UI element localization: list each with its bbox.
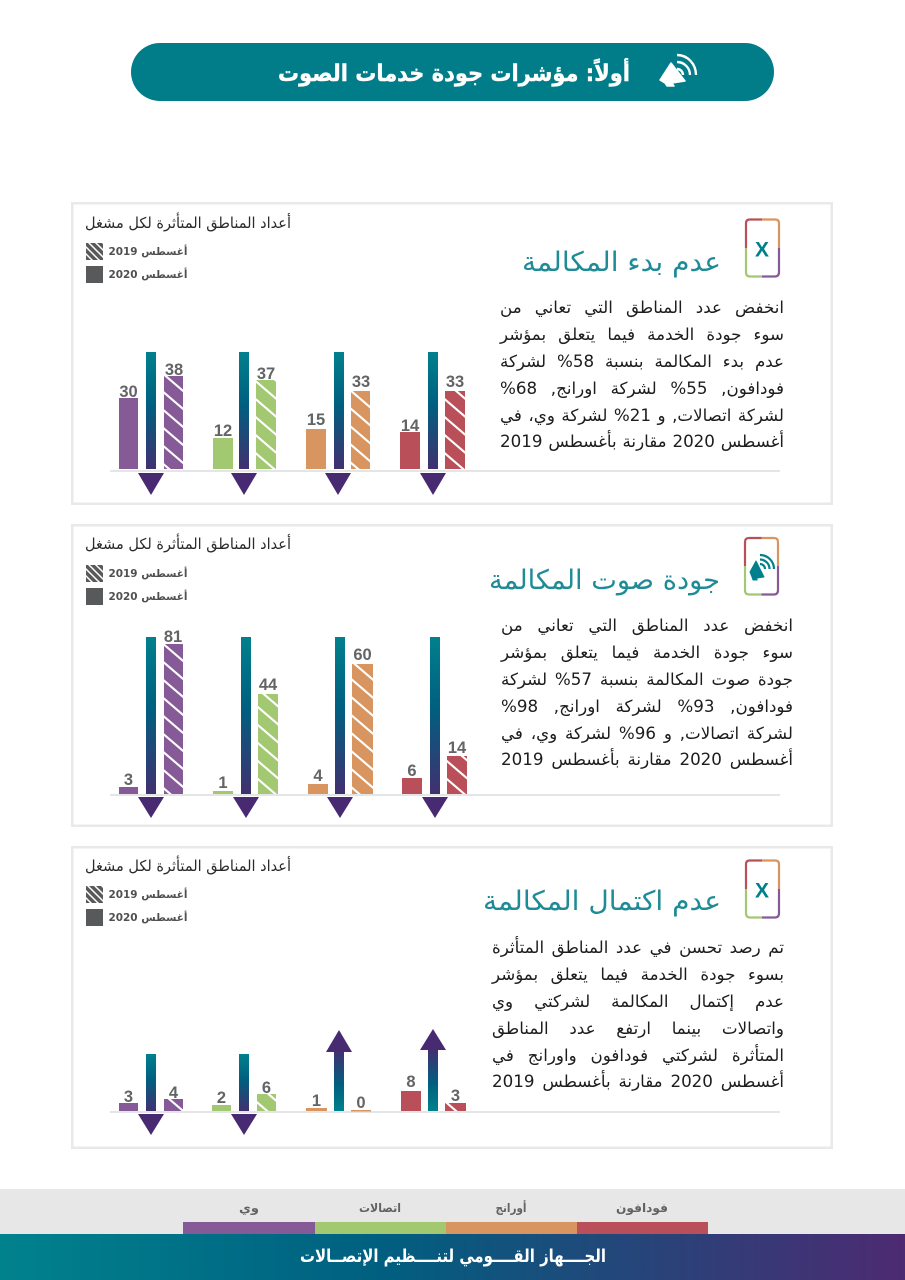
bar chart: 3 bbox=[124, 771, 133, 789]
bar chart: 30 bbox=[119, 383, 138, 401]
bar chart bbox=[119, 1029, 466, 1135]
legend bbox=[86, 565, 188, 605]
bar chart: 38 bbox=[165, 361, 183, 379]
body text bbox=[500, 615, 793, 769]
baseline bbox=[110, 470, 780, 472]
panel heading: عدم اكتمال المكالمة bbox=[483, 886, 721, 917]
heading: voice quality indicators: أولاً: مؤشرات جودة خدمات الصوت bbox=[278, 57, 630, 87]
body text: المتأثرة لشركتي فودافون واورانج في bbox=[492, 1045, 784, 1065]
legend: أغسطس 2019 bbox=[108, 887, 188, 901]
legend: operators: أورانج bbox=[496, 1200, 526, 1216]
chart heading: أعداد المناطق المتأثرة لكل مشغل bbox=[85, 533, 291, 553]
bar chart: 4 bbox=[169, 1084, 179, 1102]
footer band bbox=[0, 1234, 905, 1280]
chart heading: أعداد المناطق المتأثرة لكل مشغل bbox=[85, 855, 291, 875]
body text: انخفض عدد المناطق التي تعاني من bbox=[500, 297, 784, 317]
bar chart: 0 bbox=[356, 1094, 366, 1112]
legend: operators: فودافون bbox=[616, 1201, 668, 1216]
panel heading: جودة صوت المكالمة bbox=[489, 565, 720, 596]
legend: أغسطس 2020 bbox=[108, 910, 188, 924]
body text: لشركة اتصالات, و 21% لشركة وي، في bbox=[500, 405, 784, 425]
panel: call completion failure bbox=[71, 846, 833, 1149]
body text: عدم إكتمال المكالمة لشركتي وي bbox=[492, 991, 784, 1011]
body text: بسوء جودة الخدمة فيما يتعلق بمؤشر bbox=[492, 964, 784, 984]
legend: أغسطس 2019 bbox=[108, 566, 188, 580]
chart heading: أعداد المناطق المتأثرة لكل مشغل bbox=[85, 212, 291, 232]
legend: operators: اتصالات bbox=[359, 1201, 401, 1215]
bar chart: 1 bbox=[218, 774, 228, 792]
icon: phone with X: X bbox=[755, 238, 769, 262]
legend: أغسطس 2020 bbox=[108, 267, 188, 281]
bar chart: 44 bbox=[259, 676, 278, 694]
body text: أغسطس 2020 مقارنة بأغسطس 2019 bbox=[492, 1071, 784, 1091]
legend: أغسطس 2020 bbox=[108, 589, 188, 603]
icon: phone with speaker bbox=[745, 538, 778, 594]
body text: سوء جودة الخدمة فيما يتعلق بمؤشر bbox=[500, 324, 784, 344]
bar chart: 33 bbox=[352, 373, 370, 391]
body text: عدم بدء المكالمة بنسبة 58% لشركة bbox=[500, 351, 784, 371]
bar chart: 8 bbox=[406, 1073, 416, 1091]
legend: operators: وي bbox=[239, 1201, 259, 1216]
body text: انخفض عدد المناطق التي تعاني من bbox=[501, 615, 793, 635]
bar chart: 15 bbox=[307, 411, 325, 429]
body text: جودة صوت المكالمة بنسبة 57% لشركة bbox=[501, 669, 793, 689]
bar chart: 14 bbox=[448, 739, 467, 757]
body text: لشركة اتصالات, و 96% لشركة وي، في bbox=[501, 723, 793, 743]
panel: call setup failure bbox=[71, 202, 833, 505]
icon: phone with X bbox=[746, 220, 779, 276]
body text bbox=[491, 936, 784, 1091]
bar chart: 33 bbox=[446, 373, 464, 391]
panel heading: عدم بدء المكالمة bbox=[522, 247, 721, 278]
legend bbox=[86, 243, 188, 283]
body text: أغسطس 2020 مقارنة بأغسطس 2019 bbox=[500, 431, 784, 451]
body text: سوء جودة الخدمة فيما يتعلق بمؤشر bbox=[501, 642, 793, 662]
body text: فودافون, 55% لشركة اورانج, 68% bbox=[500, 378, 784, 398]
icon: speaker bbox=[660, 55, 696, 86]
bar chart: 3 bbox=[451, 1087, 460, 1105]
body text: أغسطس 2020 مقارنة بأغسطس 2019 bbox=[501, 749, 793, 769]
footer band: الجــــهاز القــــومي لتنــــظيم الإتصــالات bbox=[300, 1246, 606, 1267]
bar chart: 14 bbox=[401, 417, 420, 435]
bar chart: 4 bbox=[313, 767, 323, 785]
baseline bbox=[110, 794, 780, 796]
bar chart: 6 bbox=[262, 1079, 271, 1097]
panel: voice call quality bbox=[71, 524, 833, 827]
body text: تم رصد تحسن في عدد المناطق المتأثرة bbox=[492, 937, 784, 957]
body text bbox=[499, 297, 784, 451]
bar chart bbox=[119, 352, 465, 495]
body text: فودافون, 93% لشركة اورانج, 98% bbox=[501, 696, 793, 716]
icon: phone with X: X bbox=[755, 880, 769, 902]
legend: أغسطس 2019 bbox=[108, 244, 188, 258]
bar chart: 81 bbox=[164, 628, 182, 646]
icon: phone with X bbox=[746, 860, 779, 918]
footer bbox=[0, 1189, 905, 1280]
bar chart: 6 bbox=[407, 762, 417, 780]
bar chart: 37 bbox=[257, 365, 275, 383]
legend bbox=[86, 886, 188, 926]
bar chart: 60 bbox=[353, 646, 372, 664]
bar chart: 2 bbox=[217, 1089, 226, 1107]
bar chart: 3 bbox=[124, 1088, 133, 1106]
bar chart bbox=[119, 628, 467, 818]
baseline bbox=[110, 1111, 780, 1113]
title banner bbox=[131, 43, 774, 101]
legend: operators bbox=[183, 1200, 708, 1235]
body text: واتصالات بينما ارتفع عدد المناطق bbox=[492, 1018, 784, 1038]
bar chart: 1 bbox=[312, 1092, 321, 1110]
bar chart: 12 bbox=[214, 422, 232, 440]
